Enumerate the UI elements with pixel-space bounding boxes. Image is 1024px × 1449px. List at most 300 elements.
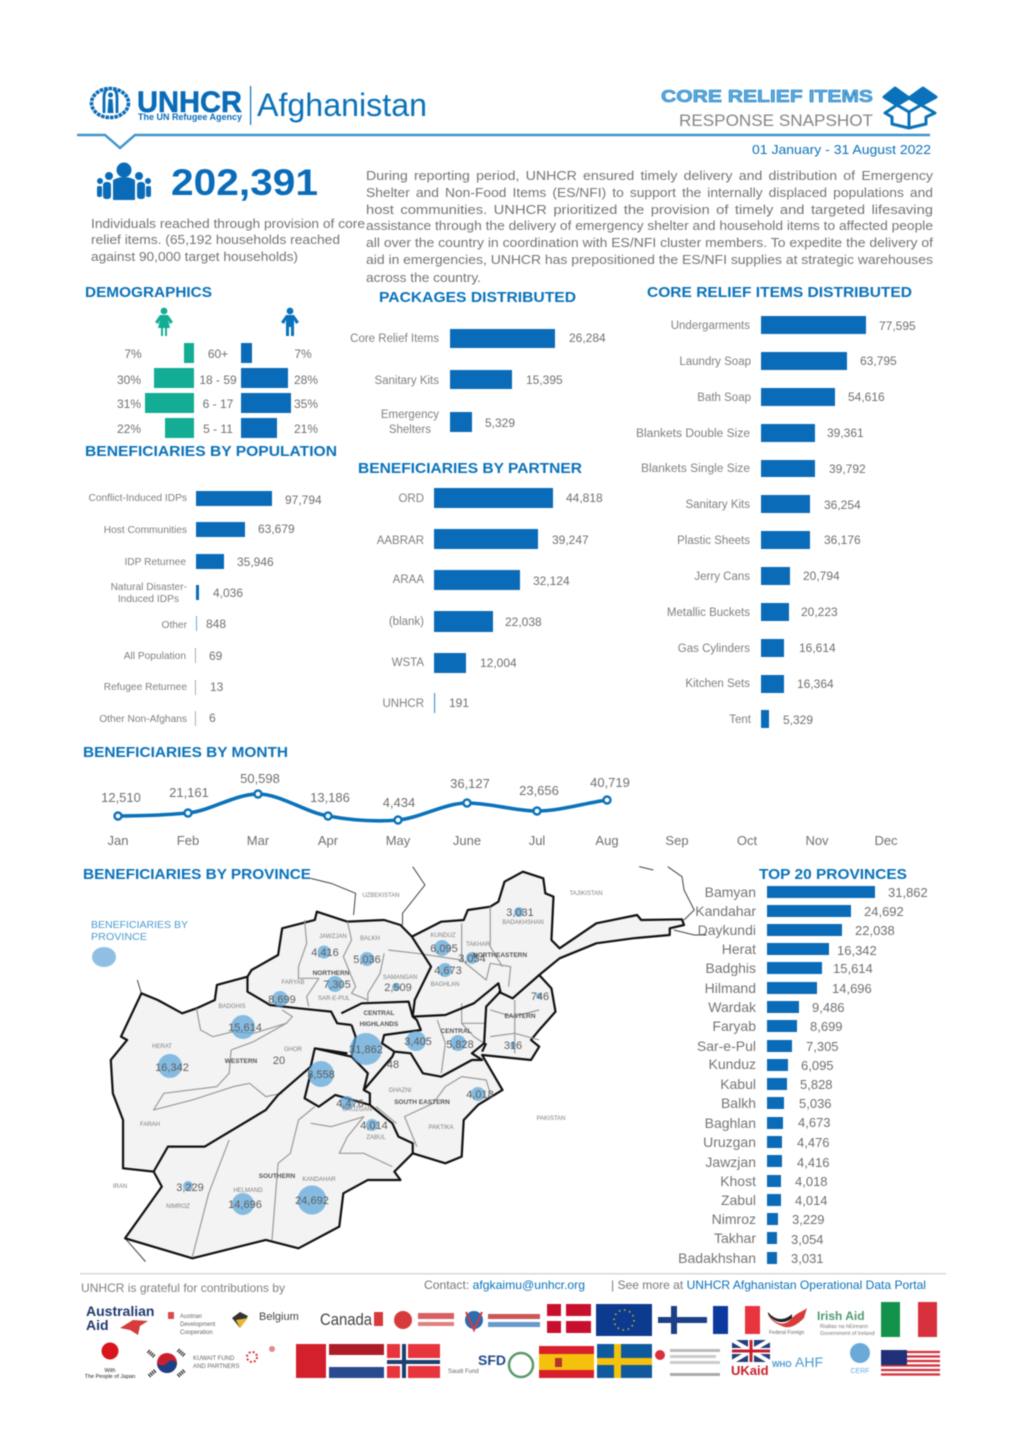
partner values: 32,124 <box>533 574 570 588</box>
top 20 province names: Faryab <box>712 1018 756 1034</box>
monthly values: 40,719 <box>590 775 630 790</box>
female bars <box>145 343 194 438</box>
top 20 values: 16,342 <box>837 943 877 958</box>
partner values: 39,247 <box>552 533 589 547</box>
logo: Australian Aid: Aid <box>86 1317 109 1333</box>
package labels: Sanitary Kits <box>374 375 439 387</box>
top 20 values: 9,486 <box>812 1000 845 1015</box>
province value labels: 16,342 <box>155 1062 189 1074</box>
month axis <box>108 833 898 848</box>
item labels: Plastic Sheets <box>677 535 750 547</box>
partner labels: (blank) <box>389 616 424 628</box>
logo: China Aid <box>394 1311 454 1329</box>
header rule with notch <box>77 135 930 148</box>
top 20 province names: Daykundi <box>698 922 756 938</box>
flag: Spain <box>539 1346 594 1378</box>
map legend: PROVINCE <box>91 931 147 943</box>
flag: Denmark <box>547 1304 591 1333</box>
logo: Irish Aid: Irish Aid <box>817 1309 865 1323</box>
province value labels: 4,476 <box>336 1098 364 1110</box>
province and region names: SAMANGAN <box>383 975 417 981</box>
logo: Japan <box>85 1342 135 1380</box>
key figure caption: against 90,000 target households) <box>91 250 298 264</box>
item labels <box>636 320 752 726</box>
population values: 4,036 <box>213 586 243 600</box>
province and region names: NORTHEASTERN <box>473 952 527 959</box>
top 20 values: 3,031 <box>791 1251 824 1266</box>
partner values: 44,818 <box>566 491 603 505</box>
logo: Kuwait partner: AND PARTNERS <box>193 1364 239 1370</box>
top 20 values: 6,095 <box>801 1058 834 1073</box>
flag: Italy <box>881 1302 937 1337</box>
age and percentage labels: 30% <box>117 373 141 387</box>
package values: 5,329 <box>485 416 515 430</box>
logo: Belgium <box>232 1311 299 1328</box>
country title: Afghanistan <box>257 87 427 123</box>
province value labels: 5,036 <box>353 954 381 966</box>
province value labels: 48 <box>387 1059 399 1071</box>
logo: AHF <box>772 1354 823 1370</box>
logo: SFD: Saudi Fund <box>448 1369 479 1375</box>
logo: AHF: AHF <box>795 1354 823 1370</box>
population labels: IDP Returnee <box>124 557 186 568</box>
partner values: 22,038 <box>505 615 542 629</box>
package labels: Core Relief Items <box>350 333 439 345</box>
top 20 province names: Kandahar <box>695 903 756 919</box>
logo: Belgium: Belgium <box>259 1311 299 1323</box>
province bubbles <box>158 907 542 1215</box>
flag: Netherlands <box>329 1344 384 1378</box>
line chart <box>114 790 610 824</box>
logo: humanitarian aid <box>465 1311 540 1330</box>
province and region names: KANDAHAR <box>302 1177 336 1183</box>
flag: Luxembourg <box>296 1344 326 1378</box>
population labels: Host Communities <box>104 525 187 536</box>
province value labels: 3,031 <box>506 907 534 919</box>
age and percentage labels: 22% <box>117 422 141 436</box>
item labels: Tent <box>729 714 752 726</box>
age and percentage labels: 21% <box>294 422 318 436</box>
population values: 69 <box>209 649 223 663</box>
item values: 39,792 <box>829 462 866 476</box>
top 20 values: 5,828 <box>800 1077 833 1092</box>
province value labels: 15,614 <box>228 1022 262 1034</box>
contributions text: UNHCR is grateful for contributions by <box>81 1281 285 1295</box>
province value labels: 24,692 <box>295 1195 329 1207</box>
intro paragraph: host communities. UNHCR prioritized the provision of timely and targeted lifesaving <box>366 203 933 217</box>
population bars <box>195 491 272 726</box>
partner values <box>449 491 603 710</box>
contact: Contact: afgkaimu@unhcr.org <box>424 1278 585 1292</box>
population labels: All Population <box>124 651 186 662</box>
province and region names: HERAT <box>152 1044 172 1050</box>
province and region names: URUZGAN <box>342 1107 372 1113</box>
province and region names: BALKH <box>360 936 380 942</box>
item labels: Sanitary Kits <box>685 499 750 511</box>
top 20 province names: Takhar <box>714 1230 756 1246</box>
province value labels: 4,673 <box>434 965 462 977</box>
top 20 values: 3,229 <box>792 1212 825 1227</box>
regional boundaries <box>154 937 539 1172</box>
top 20 province names: Khost <box>720 1173 756 1189</box>
top 20 values: 22,038 <box>855 923 895 938</box>
age and percentage labels: 31% <box>117 397 141 411</box>
top 20 values: 14,696 <box>832 981 872 996</box>
package values: 26,284 <box>569 331 606 345</box>
package values <box>485 331 606 430</box>
footer <box>80 1273 946 1380</box>
logo: UK aid <box>731 1340 770 1378</box>
partner labels: ORD <box>398 493 424 505</box>
country outline <box>111 872 684 1258</box>
top 20 province names: Bamyan <box>705 884 756 900</box>
partner labels: ARAA <box>393 574 424 586</box>
item labels: Bath Soap <box>697 392 751 404</box>
map geometry <box>111 867 706 1262</box>
month axis: Jul <box>529 833 545 848</box>
monthly values: 23,656 <box>519 783 559 798</box>
logo: SFD: SFD <box>478 1352 506 1368</box>
top 20 values: 4,014 <box>795 1193 828 1208</box>
intro paragraph: Shelter and Non-Food Items (ES/NFI) to support the internally displaced populations and <box>366 186 933 200</box>
province and region names: PAKISTAN <box>537 1116 565 1122</box>
logo: Austria: Development <box>180 1322 216 1328</box>
month axis: Apr <box>318 833 339 848</box>
province and region names: TAJIKISTAN <box>569 891 603 897</box>
panel: beneficiaries by population <box>85 443 337 726</box>
panel: beneficiaries by partner <box>358 460 603 713</box>
province value labels: 3,054 <box>458 953 486 965</box>
flag: South Korea <box>148 1350 185 1376</box>
monthly values: 36,127 <box>450 776 490 791</box>
top 20 province names: Baghlan <box>705 1115 756 1131</box>
monthly values: 21,161 <box>169 785 209 800</box>
logo: UK aid: UKaid <box>731 1363 769 1378</box>
month axis: Sep <box>665 833 689 848</box>
logo: CERF <box>850 1343 870 1375</box>
report title: CORE RELIEF ITEMS <box>661 86 873 106</box>
top 20 values: 4,416 <box>797 1155 830 1170</box>
logo: Australian Aid <box>86 1303 154 1335</box>
province and region names: WESTERN <box>225 1058 258 1065</box>
population labels <box>88 493 188 725</box>
province and region names: CENTRAL <box>363 1010 395 1017</box>
item values: 39,361 <box>827 426 864 440</box>
heading: month: BENEFICIARIES BY MONTH <box>83 744 288 761</box>
age and percentage labels: 18 - 59 <box>199 373 237 387</box>
intro paragraph: assistance through the delivery of emergency shelter and household items to affected people <box>366 219 933 233</box>
population values: 97,794 <box>285 493 322 507</box>
monthly values <box>101 771 630 810</box>
logo: Irish Aid: Government of Ireland <box>820 1331 875 1337</box>
top 20 province names: Sar-e-Pul <box>697 1038 756 1054</box>
province and region names: KUNDUZ <box>430 933 456 939</box>
province and region names: UZBEKISTAN <box>362 893 400 899</box>
top 20 values: 31,862 <box>888 885 928 900</box>
age and percentage labels: 6 - 17 <box>203 397 234 411</box>
province value labels <box>155 907 549 1211</box>
date: 01 January - 31 August 2022 <box>752 143 931 157</box>
province value labels: 20 <box>273 1055 285 1067</box>
heading: packages: PACKAGES DISTRIBUTED <box>379 289 576 306</box>
partner values: 191 <box>449 696 469 710</box>
month axis: Aug <box>595 833 619 848</box>
province value labels: 8,699 <box>268 994 296 1006</box>
top 20 province names: Kabul <box>720 1076 756 1092</box>
flag: USA <box>881 1350 940 1378</box>
intro paragraph <box>366 169 934 285</box>
panel: beneficiaries by month <box>83 744 898 848</box>
population labels: Natural Disaster- <box>111 582 187 593</box>
age and percentage labels: 5 - 11 <box>203 422 233 436</box>
top 20 province names: Nimroz <box>712 1211 756 1227</box>
province and region names: TAKHAR <box>466 942 491 948</box>
province and region names: SAR-E-PUL <box>318 996 351 1002</box>
province and region names: GHOR <box>284 1047 303 1053</box>
top 20 province names: Wardak <box>708 999 757 1015</box>
flag: France <box>713 1306 760 1334</box>
top 20 values: 3,054 <box>791 1232 824 1247</box>
province and region names: BADGHIS <box>218 1004 246 1010</box>
panel: demographics <box>85 284 318 438</box>
key figure caption <box>91 217 365 264</box>
item labels: Jerry Cans <box>694 571 750 583</box>
key figure <box>91 162 365 264</box>
logo: Japan: With <box>104 1368 116 1374</box>
province and region names: PAKTIKA <box>429 1125 453 1131</box>
item values: 63,795 <box>860 354 897 368</box>
population labels: Other <box>162 620 188 631</box>
monthly values: 12,510 <box>101 790 141 805</box>
partner labels: UNHCR <box>382 698 424 710</box>
logo: Japan: The People of Japan <box>85 1374 135 1380</box>
item labels: Undergarments <box>671 320 750 332</box>
item labels: Laundry Soap <box>679 356 751 368</box>
population values: 35,946 <box>237 555 274 569</box>
province and region names: NIMROZ <box>166 1204 190 1210</box>
top 20 province names: Hilmand <box>705 980 756 996</box>
icon: people <box>97 162 151 200</box>
item labels: Kitchen Sets <box>685 678 750 690</box>
item values: 16,364 <box>797 677 834 691</box>
report subtitle: RESPONSE SNAPSHOT <box>679 111 873 130</box>
logo: SFD <box>448 1352 533 1377</box>
top 20 province names: Herat <box>722 941 756 957</box>
province boundaries <box>154 907 539 1257</box>
partner labels: WSTA <box>392 657 424 669</box>
age and percentage labels: 28% <box>294 373 318 387</box>
month axis: May <box>386 833 411 848</box>
province and region names: EASTERN <box>504 1013 536 1020</box>
population labels: Conflict-Induced IDPs <box>88 493 187 504</box>
population labels: Other Non-Afghans <box>99 714 187 725</box>
logo: Irish Aid: Rialtas na hEireann <box>820 1324 868 1330</box>
tagline: The UN Refugee Agency <box>138 112 242 122</box>
province and region names: SOUTHERN <box>259 1173 296 1180</box>
item values: 20,794 <box>803 569 840 583</box>
heading: demographics: DEMOGRAPHICS <box>85 284 212 301</box>
panel: core relief items distributed <box>636 284 916 728</box>
province and region names <box>113 891 603 1210</box>
icon: female <box>155 308 173 336</box>
item values: 36,254 <box>824 498 861 512</box>
top 20 province names: Uruzgan <box>703 1134 756 1150</box>
province value labels: 3,229 <box>176 1182 204 1194</box>
province value labels: 7,305 <box>323 979 351 991</box>
item bars <box>761 316 866 728</box>
divider <box>250 86 251 125</box>
province and region names: FARAH <box>140 1122 160 1128</box>
province and region names: ZABUL <box>366 1135 386 1141</box>
logo: Austria: Austrian <box>180 1314 202 1320</box>
monthly values: 4,434 <box>383 795 415 810</box>
age and percentage labels: 60+ <box>208 347 228 361</box>
month axis: Jan <box>108 833 128 848</box>
province and region names: GHAZNI <box>389 1088 412 1094</box>
logo: Austria <box>168 1312 216 1336</box>
item values: 16,614 <box>799 641 836 655</box>
top 20 values: 15,614 <box>833 961 873 976</box>
UNHCR wordmark: UNHCR <box>137 86 242 119</box>
logo: Canada: Canada <box>320 1310 372 1329</box>
logo: Germany <box>768 1308 807 1336</box>
portal link: | See more at UNHCR Afghanistan Operational Data Portal <box>611 1278 926 1292</box>
logo: Switzerland <box>655 1349 720 1376</box>
top 20 values: 7,305 <box>806 1039 839 1054</box>
province value labels: 3,405 <box>404 1036 432 1048</box>
monthly values: 50,598 <box>240 771 280 786</box>
flag: Sweden <box>597 1344 652 1378</box>
partner bars <box>434 488 553 713</box>
item labels: Metallic Buckets <box>667 607 750 619</box>
population values: 6 <box>209 711 216 725</box>
top 20 values: 4,476 <box>797 1135 830 1150</box>
intro paragraph: During reporting period, UNHCR ensured timely delivery and distribution of Emergency <box>366 169 934 183</box>
top 20 province names: Jawzjan <box>705 1154 756 1170</box>
month axis: Feb <box>177 833 199 848</box>
age and percentage labels <box>117 347 318 436</box>
province and region names: JAWZJAN <box>319 934 347 940</box>
logo: Irish Aid <box>817 1309 875 1337</box>
top 20 values: 24,692 <box>864 904 904 919</box>
logo: Kuwait partner <box>193 1346 275 1370</box>
heading: province: BENEFICIARIES BY PROVINCE <box>83 866 311 883</box>
heading: population: BENEFICIARIES BY POPULATION <box>85 443 337 460</box>
province value labels: 4,014 <box>360 1120 388 1132</box>
partner labels: AABRAR <box>377 535 424 547</box>
flag: Norway <box>387 1344 440 1378</box>
top 20 province names: Balkh <box>721 1095 756 1111</box>
province and region names: FARYAB <box>281 980 305 986</box>
top 20 province names <box>678 884 757 1266</box>
month axis: Oct <box>737 833 757 848</box>
icon: male <box>281 308 299 336</box>
item labels: Blankets Double Size <box>636 428 750 440</box>
item values <box>783 319 916 727</box>
partner values: 12,004 <box>480 656 517 670</box>
province and region names: NORTHERN <box>313 970 350 977</box>
package labels: Shelters <box>389 424 431 436</box>
male bars <box>241 343 291 438</box>
heading: top 20: TOP 20 PROVINCES <box>759 866 907 883</box>
province value labels: 8,558 <box>307 1069 335 1081</box>
top 20 bars <box>767 886 875 1264</box>
top 20 values: 8,699 <box>810 1019 843 1034</box>
heading: partner: BENEFICIARIES BY PARTNER <box>358 460 582 477</box>
province and region names: BAGHLAN <box>431 982 459 988</box>
item values: 20,223 <box>801 605 838 619</box>
province value labels: 4,416 <box>311 947 339 959</box>
top 20 province names: Badakhshan <box>678 1250 756 1266</box>
item values: 36,176 <box>824 533 861 547</box>
icon: box <box>884 88 936 128</box>
top 20 province names: Kunduz <box>709 1056 756 1072</box>
item labels: Gas Cylinders <box>678 643 750 655</box>
key figure caption: Individuals reached through provision of core <box>91 217 365 231</box>
province value labels: 14,696 <box>228 1199 262 1211</box>
province value labels: 5,828 <box>446 1039 474 1051</box>
icon: UNHCR logo <box>92 88 128 118</box>
logo: AHF: WHO <box>772 1360 792 1369</box>
partner labels <box>377 493 424 710</box>
province value labels: 6,095 <box>430 943 458 955</box>
package bars <box>450 329 555 432</box>
population labels: Refugee Returnee <box>104 682 187 693</box>
province value labels: 316 <box>504 1040 522 1052</box>
province value labels: 2,509 <box>384 982 412 994</box>
package labels: Emergency <box>381 409 439 421</box>
panel: beneficiaries by province map <box>83 866 706 1262</box>
top 20 values <box>791 885 928 1266</box>
big number: 202,391 <box>171 162 318 203</box>
intro paragraph: across the country. <box>366 271 481 285</box>
top 20 province names: Zabul <box>721 1192 756 1208</box>
top 20 values: 4,018 <box>795 1174 828 1189</box>
month axis: Nov <box>805 833 829 848</box>
panel: packages distributed <box>350 289 606 436</box>
population values: 848 <box>206 617 226 631</box>
province and region names: HIGHLANDS <box>360 1021 399 1028</box>
footer rule <box>80 1273 946 1274</box>
panel: top 20 provinces <box>678 866 928 1266</box>
item values: 77,595 <box>879 319 916 333</box>
province and region names: IRAN <box>113 1184 127 1190</box>
flag: Finland <box>658 1306 707 1334</box>
age and percentage labels: 7% <box>294 347 312 361</box>
neighbouring borders <box>125 867 706 1262</box>
map legend: BENEFICIARIES BY <box>91 919 188 931</box>
intro paragraph: all over the country in coordination with ES/NFI cluster members. To expedite the delivery of <box>366 236 934 250</box>
population values: 13 <box>210 680 224 694</box>
province value labels: 31,862 <box>349 1044 383 1056</box>
population labels: Induced IDPs <box>118 594 179 605</box>
population values <box>206 493 322 725</box>
top 20 values: 4,673 <box>798 1115 831 1130</box>
heading: core relief items: CORE RELIEF ITEMS DISTRIBUTED <box>647 284 912 301</box>
monthly values: 13,186 <box>310 790 350 805</box>
province value labels: 746 <box>531 991 549 1003</box>
logo: Kuwait partner: KUWAIT FUND <box>193 1356 235 1362</box>
province and region names: SOUTH EASTERN <box>394 1099 450 1106</box>
package values: 15,395 <box>526 373 563 387</box>
population values: 63,679 <box>258 522 295 536</box>
province and region names: HELMAND <box>233 1188 263 1194</box>
key figure caption: relief items. (65,192 households reached <box>91 233 340 247</box>
intro paragraph: aid in emergencies, UNHCR has prepositioned the ES/NFI supplies at strategic warehouses <box>366 253 933 267</box>
month axis: Dec <box>874 833 898 848</box>
item values: 54,616 <box>848 390 885 404</box>
logo: Germany: Federal Foreign <box>769 1330 805 1336</box>
